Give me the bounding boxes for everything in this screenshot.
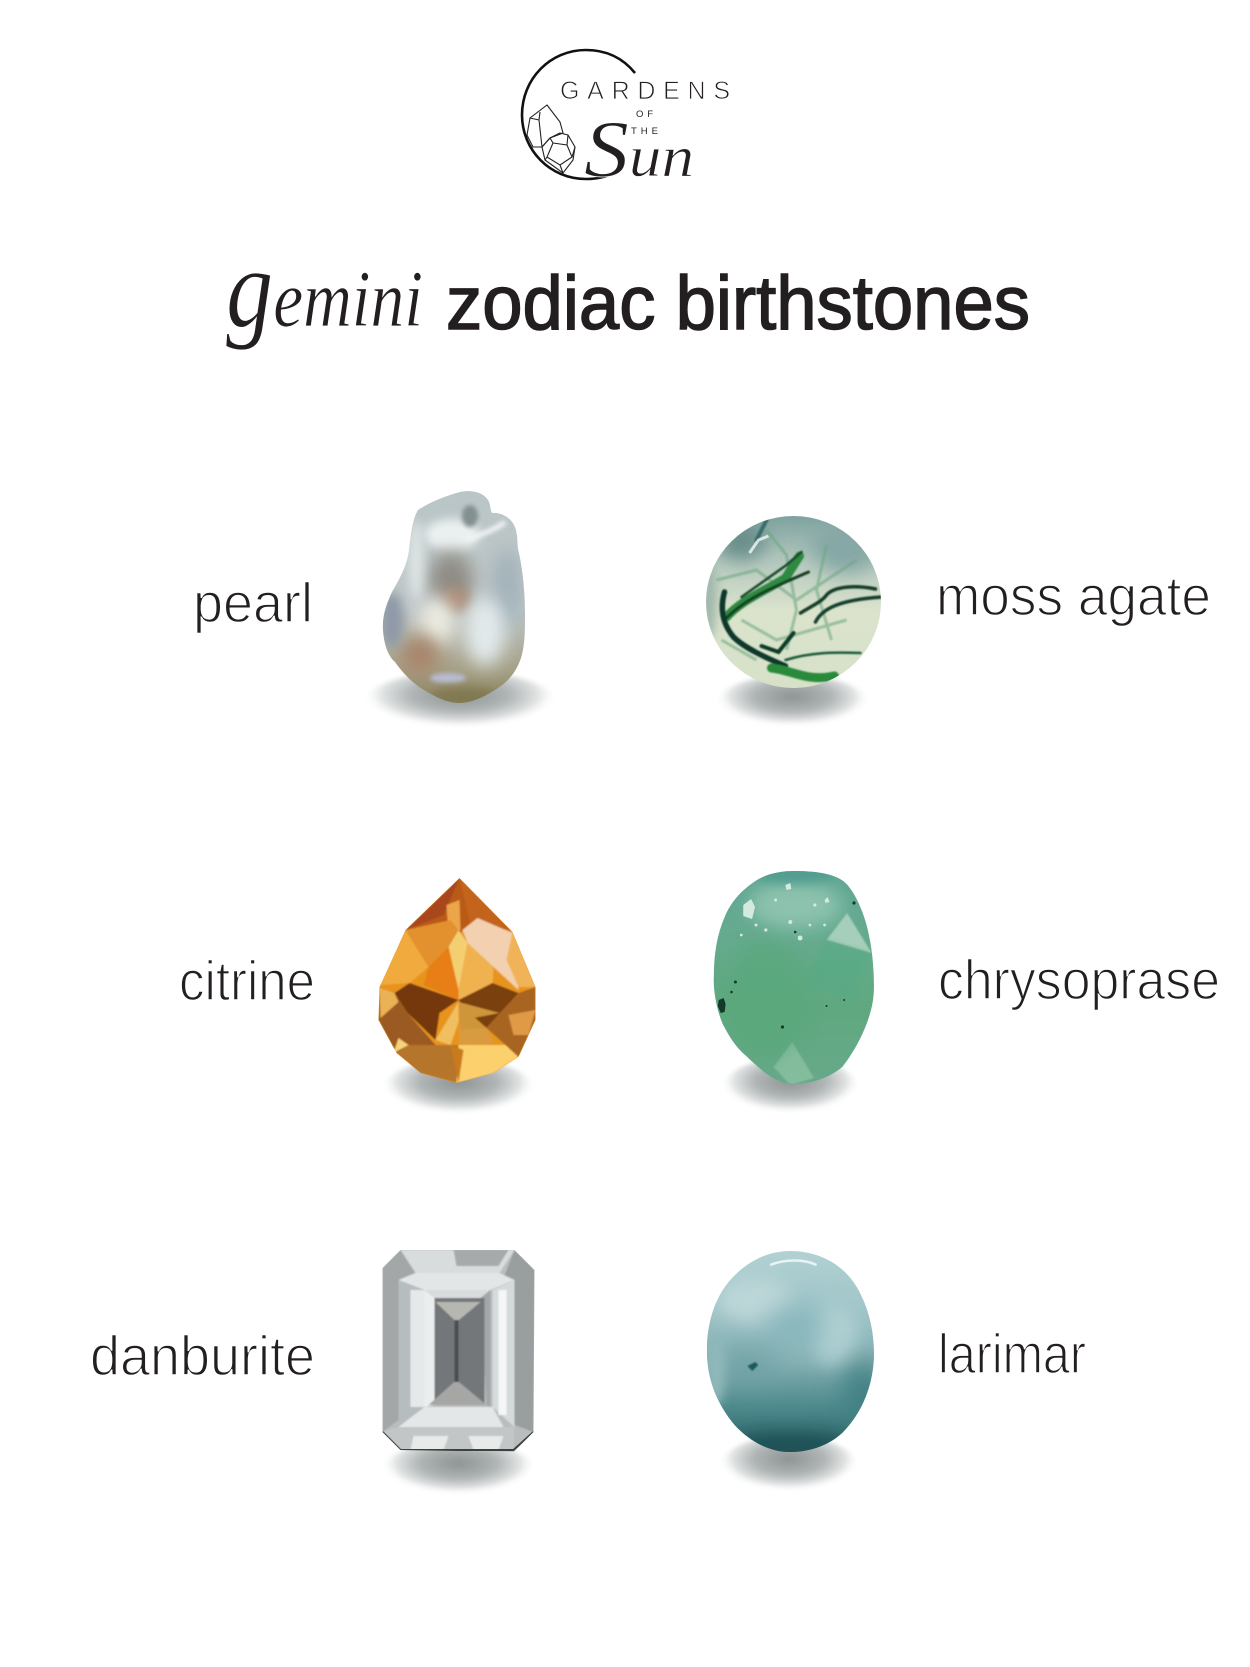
label: danburite: danburite bbox=[90, 1324, 315, 1387]
chrysoprase shadow bbox=[720, 1058, 861, 1122]
stone: moss agate bbox=[706, 516, 881, 724]
stone: citrine bbox=[378, 878, 536, 1111]
label: pearl: pearl bbox=[193, 571, 313, 634]
moss agate shadow bbox=[714, 675, 870, 735]
stone: larimar bbox=[706, 1251, 874, 1488]
label: citrine: citrine bbox=[179, 949, 315, 1012]
danburite shadow bbox=[380, 1441, 536, 1503]
title word: gemini: gemini bbox=[226, 227, 423, 351]
pearl shadow bbox=[362, 671, 558, 737]
citrine shadow bbox=[380, 1059, 536, 1123]
larimar shadow bbox=[718, 1436, 860, 1500]
moss agate body bbox=[706, 516, 881, 688]
stone: danburite bbox=[382, 1250, 534, 1492]
label: larimar: larimar bbox=[938, 1322, 1086, 1385]
logo crystals bbox=[527, 105, 575, 173]
stone: pearl bbox=[372, 491, 548, 725]
stone: chrysoprase bbox=[714, 871, 874, 1110]
chrysoprase body bbox=[714, 871, 874, 1084]
title bbox=[226, 227, 1030, 351]
logo text: Sun script: Sun bbox=[584, 106, 694, 194]
pearl body bbox=[382, 491, 525, 703]
larimar body bbox=[706, 1251, 874, 1452]
logo: Gardens of the Sun bbox=[522, 50, 730, 194]
danburite body bbox=[382, 1250, 534, 1452]
label: chrysoprase: chrysoprase bbox=[938, 948, 1220, 1011]
label: moss agate: moss agate bbox=[936, 564, 1211, 627]
title words: zodiac birthstones: zodiac birthstones bbox=[446, 261, 1030, 346]
infographic canvas bbox=[93, 48, 1217, 1492]
logo text: GARDENS: GARDENS bbox=[560, 77, 730, 105]
logo text: OF: OF bbox=[636, 109, 653, 120]
citrine body bbox=[378, 878, 536, 1083]
logo text: THE: THE bbox=[631, 126, 658, 137]
logo ring bbox=[522, 50, 635, 179]
